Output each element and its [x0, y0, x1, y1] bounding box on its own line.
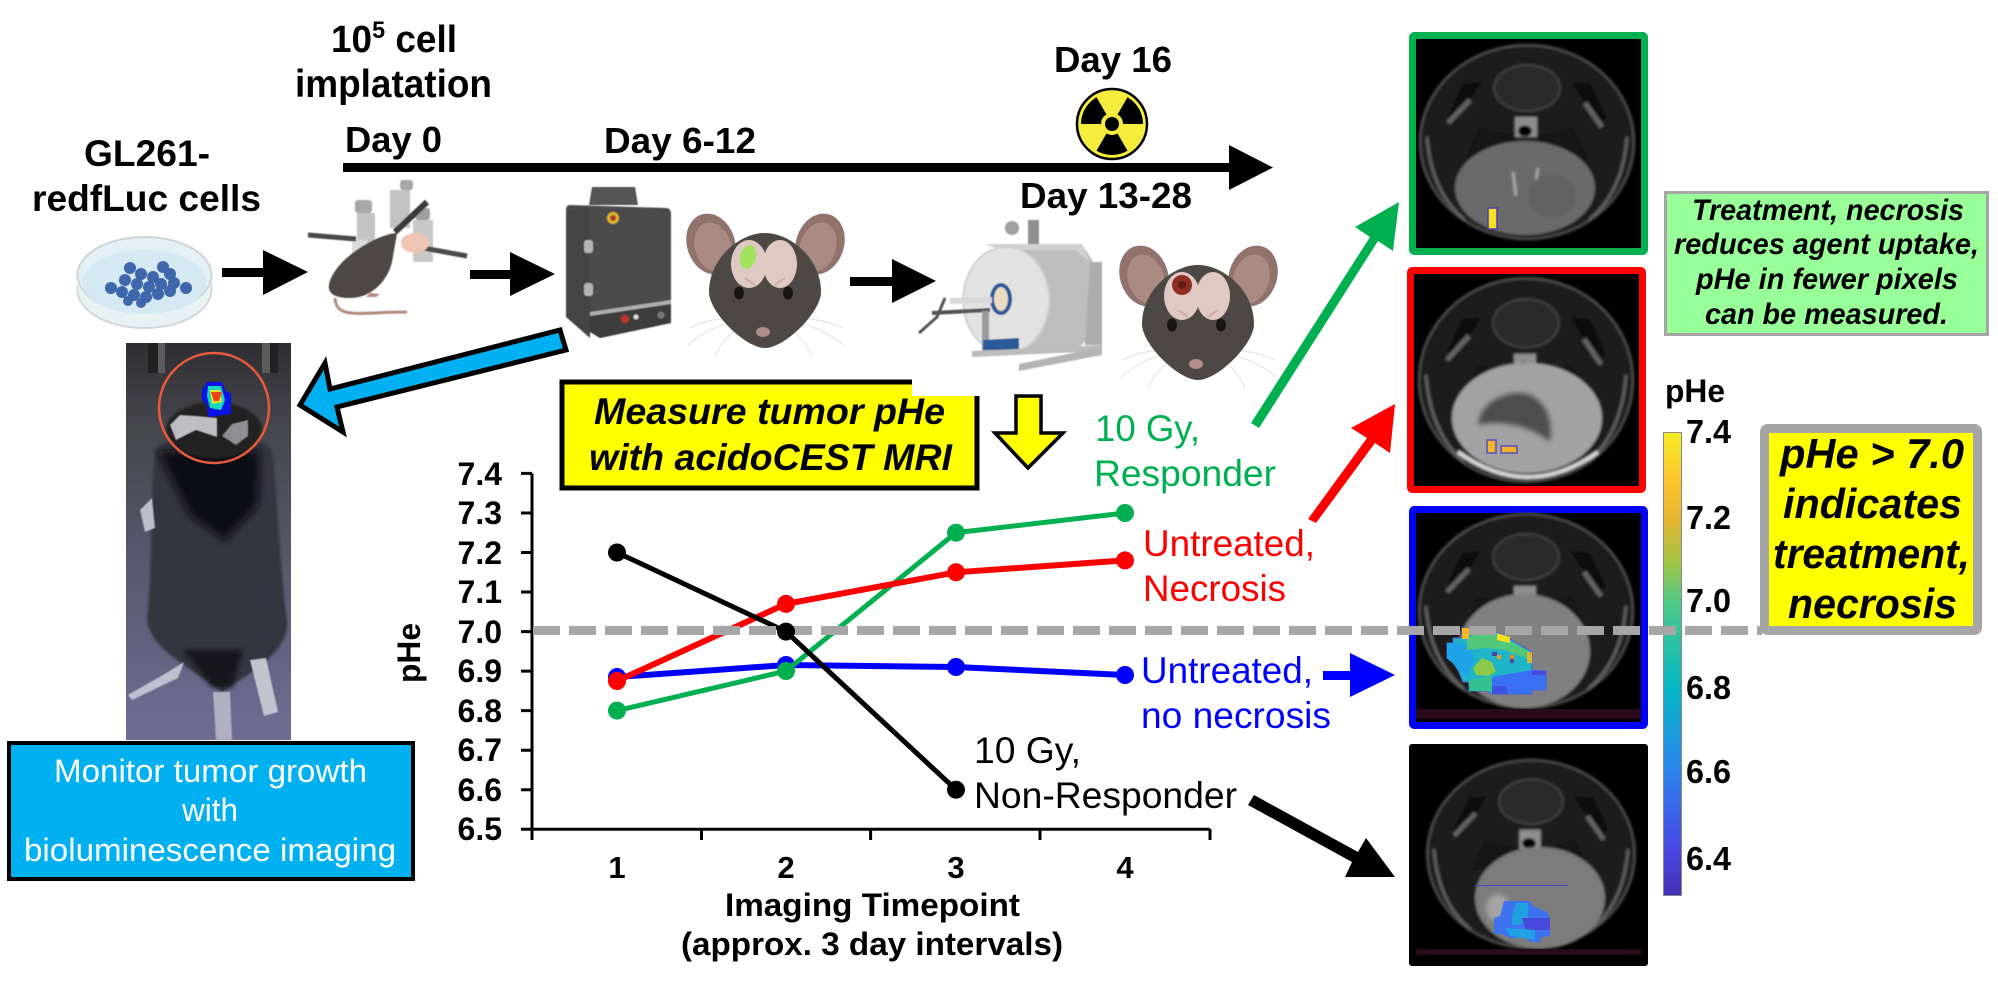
- icon: mouse head with necrotic tumor: [1112, 239, 1285, 388]
- y axis labels: 6.9: [458, 653, 502, 689]
- arrow: dish to stereotaxic: [222, 250, 308, 295]
- icon: MRI scanner: [919, 220, 1102, 371]
- label: cell implantation: implatation: [295, 63, 492, 106]
- legend label: 10 Gy, Responder: [1094, 408, 1276, 494]
- y axis labels: 6.5: [458, 811, 502, 847]
- region of interest circle: [159, 353, 269, 463]
- panel: non-responder MRI (black frame): [1409, 744, 1648, 966]
- callout: treatment necrosis note: reduces agent uptake,: [1674, 228, 1979, 261]
- dark strip: [1416, 709, 1641, 719]
- y axis labels: 7.2: [458, 535, 502, 571]
- legend label: 10 Gy, Non-Responder: 10 Gy,: [974, 730, 1081, 771]
- callout: pHe above 7.0: pHe > 7.0: [1779, 430, 1964, 477]
- legend label: 10 Gy, Responder: 10 Gy,: [1095, 408, 1200, 449]
- y axis labels: [458, 456, 502, 847]
- callout: measure tumor pHe: [562, 376, 982, 488]
- callout: monitor tumor growth: Monitor tumor growth: [54, 753, 367, 789]
- x axis labels: [608, 850, 1134, 885]
- x axis labels: 1: [608, 850, 626, 885]
- legend label: 10 Gy, Non-Responder: Non-Responder: [974, 775, 1237, 816]
- colorbar tick labels: [1686, 413, 1732, 877]
- panel: untreated no necrosis MRI (blue frame): [1412, 510, 1644, 726]
- arrow: yellow down arrow: [995, 396, 1063, 468]
- callout: measure tumor pHe: Measure tumor pHe: [594, 391, 945, 432]
- pHe map: [1494, 901, 1550, 942]
- icon: stereotaxic mouse: [308, 180, 467, 313]
- bioluminescence signal: [202, 382, 231, 417]
- arrow: stereotaxic to imaging system: [470, 252, 555, 296]
- photo: bioluminescence mouse: [126, 343, 291, 740]
- x axis labels: 4: [1116, 850, 1134, 885]
- legend label: Untreated, Necrosis: Necrosis: [1143, 568, 1286, 609]
- thin map line: [1475, 885, 1568, 886]
- arrow: green to responder image: [1251, 202, 1399, 428]
- label: Day 13-28: Day 13-28: [1020, 175, 1192, 216]
- label: cell implantation: 5: [372, 17, 385, 44]
- icon: petri dish: [78, 237, 212, 328]
- chart: pHe by imaging timepoint: [391, 456, 1210, 962]
- callout: treatment necrosis note: pHe in fewer pixels: [1695, 263, 1958, 296]
- series: untreated necrosis: [608, 551, 1134, 690]
- legend label: Untreated, Necrosis: Untreated,: [1143, 523, 1315, 564]
- series: 10 Gy non-responder: [608, 544, 965, 799]
- callout: treatment necrosis note: [1666, 192, 1988, 334]
- label: Day 6-12: Day 6-12: [604, 120, 756, 161]
- chart axes: [521, 473, 1210, 840]
- callout: pHe above 7.0: indicates: [1783, 480, 1962, 527]
- timeline arrow: [343, 145, 1273, 190]
- legend label: Untreated, no necrosis: no necrosis: [1141, 695, 1331, 736]
- y axis labels: 7.4: [458, 456, 502, 492]
- colorbar: [1664, 413, 1732, 896]
- arrow: blue to no necrosis image: [1323, 653, 1395, 697]
- label: Day 0: Day 0: [345, 119, 442, 160]
- label: GL261-redfLuc cells: [32, 133, 261, 219]
- label: cell implantation: cell: [385, 19, 457, 61]
- y axis labels: 7.1: [458, 574, 502, 610]
- callout: treatment necrosis note: Treatment, necrosis: [1692, 194, 1964, 227]
- label: Day 16: Day 16: [1054, 39, 1172, 80]
- black data point on threshold: timepoint 2: [777, 623, 795, 641]
- label: cell implantation: 10: [331, 19, 373, 61]
- panel: responder MRI (green frame): [1412, 36, 1644, 252]
- threshold line: pHe 7.0: [533, 626, 1762, 635]
- arrow: imager to photo (blue): [300, 330, 566, 432]
- colorbar tick labels: 7.2: [1686, 499, 1731, 536]
- legend label: 10 Gy, Responder: Responder: [1094, 453, 1276, 494]
- y axis labels: 6.6: [458, 772, 502, 808]
- callout: pHe above 7.0: [1764, 428, 1978, 630]
- pHe pixels: [1487, 440, 1517, 453]
- label: GL261-redfLuc cells: redfLuc cells: [32, 178, 261, 219]
- callout: pHe above 7.0: necrosis: [1788, 580, 1957, 627]
- callout: monitor tumor growth: [9, 743, 413, 879]
- arrow: mouse head to MRI: [850, 259, 936, 303]
- y axis labels: 6.7: [458, 732, 502, 768]
- x axis title: Imaging Timepoint: [725, 887, 1020, 923]
- colorbar tick labels: 6.8: [1686, 669, 1731, 706]
- arrow: red to necrosis image: [1308, 404, 1395, 523]
- pHe map: [1447, 628, 1546, 694]
- dark strip: [1416, 949, 1641, 955]
- colorbar tick labels: 7.0: [1686, 582, 1731, 619]
- legend label: Untreated, Necrosis: [1143, 523, 1315, 609]
- panel: untreated necrosis MRI (red frame): [1410, 270, 1642, 490]
- callout: measure tumor pHe: with acidoCEST MRI: [589, 437, 953, 478]
- label: cell implantation: [295, 17, 492, 106]
- x axis labels: 2: [777, 850, 795, 885]
- y axis labels: 7.3: [458, 495, 502, 531]
- colorbar tick labels: 6.4: [1686, 840, 1732, 877]
- arrow: black to non-responder image: [1248, 795, 1395, 877]
- label: GL261-redfLuc cells: GL261-: [84, 133, 210, 174]
- colorbar tick labels: 6.6: [1686, 753, 1731, 790]
- legend label: Untreated, no necrosis: Untreated,: [1141, 650, 1313, 691]
- pHe pixels: [1488, 208, 1497, 229]
- x axis labels: 3: [947, 850, 965, 885]
- callout: monitor tumor growth: bioluminescence imaging: [24, 832, 396, 868]
- legend label: 10 Gy, Non-Responder: [974, 730, 1237, 816]
- y axis labels: 6.8: [458, 693, 502, 729]
- callout: treatment necrosis note: can be measured.: [1705, 298, 1948, 331]
- y axis labels: 7.0: [458, 614, 502, 650]
- legend label: Untreated, no necrosis: [1141, 650, 1331, 736]
- series: 10 Gy responder: [608, 504, 1134, 720]
- series: untreated no necrosis: [608, 656, 1134, 686]
- callout: monitor tumor growth: with: [181, 792, 238, 828]
- x axis title: (approx. 3 day intervals): [681, 926, 1063, 962]
- icon: radiation symbol: [1077, 89, 1147, 159]
- x axis title: [681, 887, 1063, 962]
- colorbar label: pHe: pHe: [1665, 373, 1725, 409]
- y axis title: pHe: [391, 623, 427, 683]
- callout: pHe above 7.0: treatment,: [1773, 530, 1970, 577]
- colorbar tick labels: 7.4: [1686, 413, 1732, 450]
- icon: mouse head with green tumor: [679, 207, 852, 356]
- icon: bioluminescence imager: [566, 187, 671, 338]
